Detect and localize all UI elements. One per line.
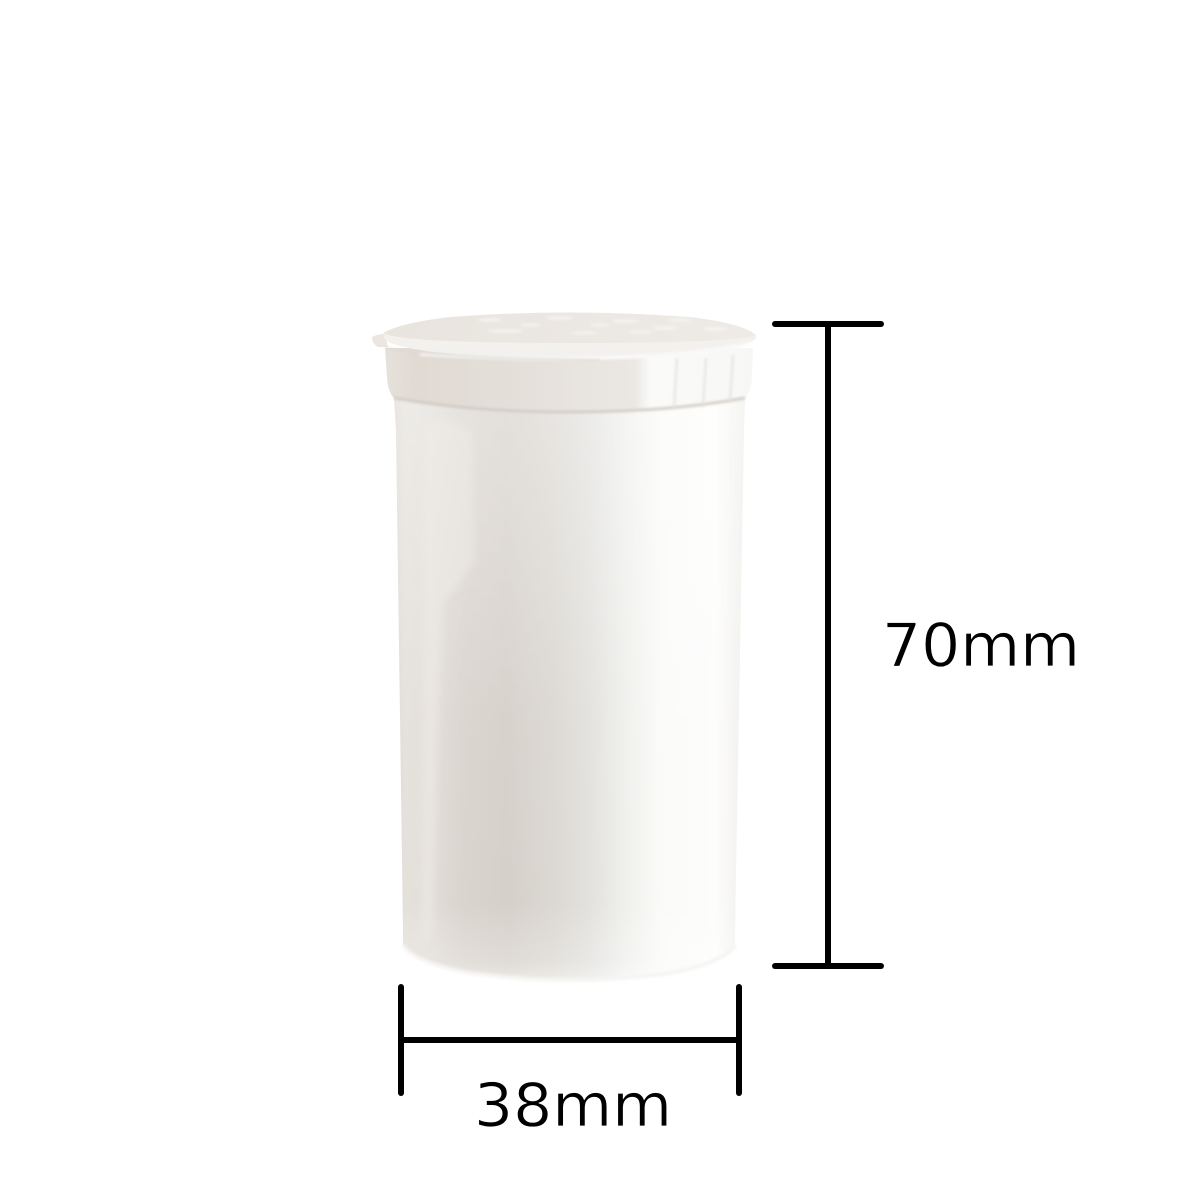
height marker line <box>775 324 881 966</box>
container <box>372 312 756 980</box>
width marker line <box>401 987 739 1093</box>
container collar <box>385 348 753 412</box>
container lid <box>372 312 756 360</box>
lid embossed pattern <box>478 316 727 335</box>
height label: 70mm <box>882 611 1080 681</box>
container body <box>394 398 745 980</box>
width label: 38mm <box>474 1071 672 1141</box>
